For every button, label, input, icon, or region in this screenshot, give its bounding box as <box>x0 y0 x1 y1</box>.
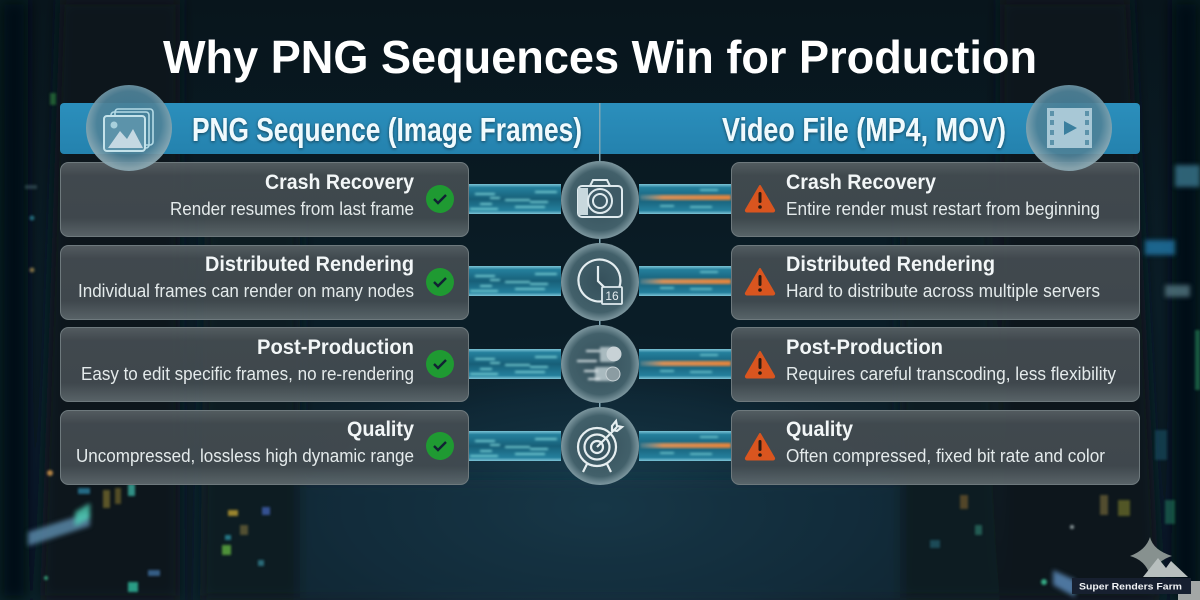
heading: video file: Video File (MP4, MOV) <box>722 111 1006 148</box>
beam right <box>639 266 731 296</box>
beam right <box>639 431 731 461</box>
card: video post-production: Requires careful transcoding, less flexibility <box>786 364 1116 384</box>
card: PNG quality: Quality <box>347 418 414 441</box>
icon: camera <box>561 161 639 239</box>
card: video post-production: Post-Production <box>786 336 943 359</box>
beam left <box>469 431 561 461</box>
card: PNG crash recovery <box>60 162 468 236</box>
card: video crash recovery: Crash Recovery <box>786 171 936 194</box>
icon: orange warning <box>746 352 774 378</box>
card: video distributed rendering: Hard to distribute across multiple servers <box>786 281 1100 301</box>
row 4: quality <box>60 407 1140 485</box>
beam right <box>639 184 731 214</box>
icon: orange warning <box>746 269 774 295</box>
header bar <box>60 103 1140 154</box>
card: PNG quality <box>60 410 468 484</box>
icon: green check <box>426 350 454 378</box>
card: PNG post-production <box>60 328 468 402</box>
row 2: distributed rendering <box>60 243 1140 321</box>
center divider line <box>599 103 600 443</box>
card: video distributed rendering <box>732 246 1140 320</box>
icon: clock with calendar <box>561 243 639 321</box>
watermark logo: Super Renders Farm: Super Renders Farm <box>1079 582 1182 592</box>
card: PNG quality: Uncompressed, lossless high dynamic range <box>76 446 414 466</box>
card: PNG post-production: Easy to edit specific frames, no re-rendering <box>81 364 414 384</box>
card: video crash recovery: Entire render must restart from beginning <box>786 199 1100 219</box>
icon: green check <box>426 185 454 213</box>
beam left <box>469 349 561 379</box>
beam left <box>469 184 561 214</box>
card: video quality: Quality <box>786 418 853 441</box>
card: video quality: Often compressed, fixed bit rate and color <box>786 446 1105 466</box>
card: video distributed rendering: Distributed Rendering <box>786 253 995 276</box>
card: PNG post-production: Post-Production <box>257 336 414 359</box>
icon: green check <box>426 432 454 460</box>
title: Why PNG Sequences Win for Production <box>163 31 1037 83</box>
beam left <box>469 266 561 296</box>
card: video quality <box>732 410 1140 484</box>
icon: video film strip <box>1026 85 1112 171</box>
card: PNG distributed rendering: Distributed Rendering <box>205 253 414 276</box>
card: video crash recovery <box>732 162 1140 236</box>
icon: target with arrow <box>561 407 639 485</box>
icon: clock with calendar: 16 <box>605 289 619 303</box>
row 1: crash recovery <box>60 161 1140 239</box>
card: PNG distributed rendering <box>60 246 468 320</box>
icon: green check <box>426 268 454 296</box>
card: PNG crash recovery: Render resumes from last frame <box>170 199 414 219</box>
watermark logo: Super Renders Farm <box>1072 537 1200 600</box>
row 3: post-production <box>60 325 1140 403</box>
heading: PNG sequence: PNG Sequence (Image Frames) <box>192 111 582 148</box>
card: video post-production <box>732 328 1140 402</box>
icon: motion spheres <box>561 325 639 403</box>
icon: orange warning <box>746 186 774 212</box>
beam right <box>639 349 731 379</box>
icon: orange warning <box>746 434 774 460</box>
icon: image frames stack <box>86 85 172 171</box>
card: PNG crash recovery: Crash Recovery <box>265 171 414 194</box>
card: PNG distributed rendering: Individual frames can render on many nodes <box>78 281 414 301</box>
